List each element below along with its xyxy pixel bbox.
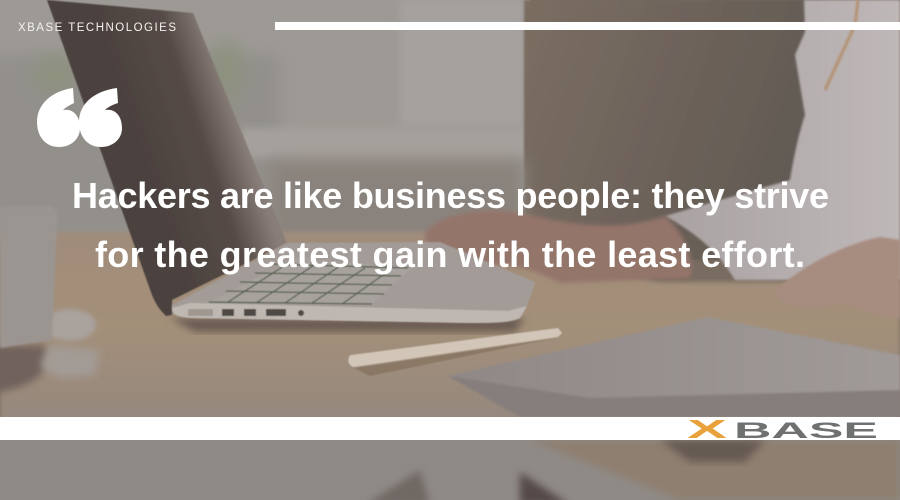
typing hand [425,210,692,283]
quote text [72,175,829,275]
notebook [448,317,900,417]
room wall and window [0,0,824,260]
laptop screen [47,0,287,316]
white logo strip [0,417,900,440]
plant [33,42,245,102]
desk surface [0,232,900,500]
top white rule [275,22,900,30]
quote line 1: Hackers are like business people: they strive [72,175,829,216]
lower photo strip [0,440,900,500]
hair strand [825,0,858,90]
logo: XBASE [687,414,878,444]
icon: quotation mark [37,88,122,147]
laptop ports [188,309,304,316]
resting hand [776,237,900,318]
brand name: XBASE TECHNOLOGIES [18,22,176,34]
logo word BASE: BASE [734,418,878,443]
pen [348,328,562,376]
laptop base [172,242,535,323]
quote line 2: for the greatest gain with the least effort. [95,234,805,275]
keyboard [209,258,412,304]
laptop shadow [170,318,525,332]
coffee cup and saucer [0,207,100,392]
shirt of person [665,0,900,280]
logo letter X: X [687,414,729,444]
